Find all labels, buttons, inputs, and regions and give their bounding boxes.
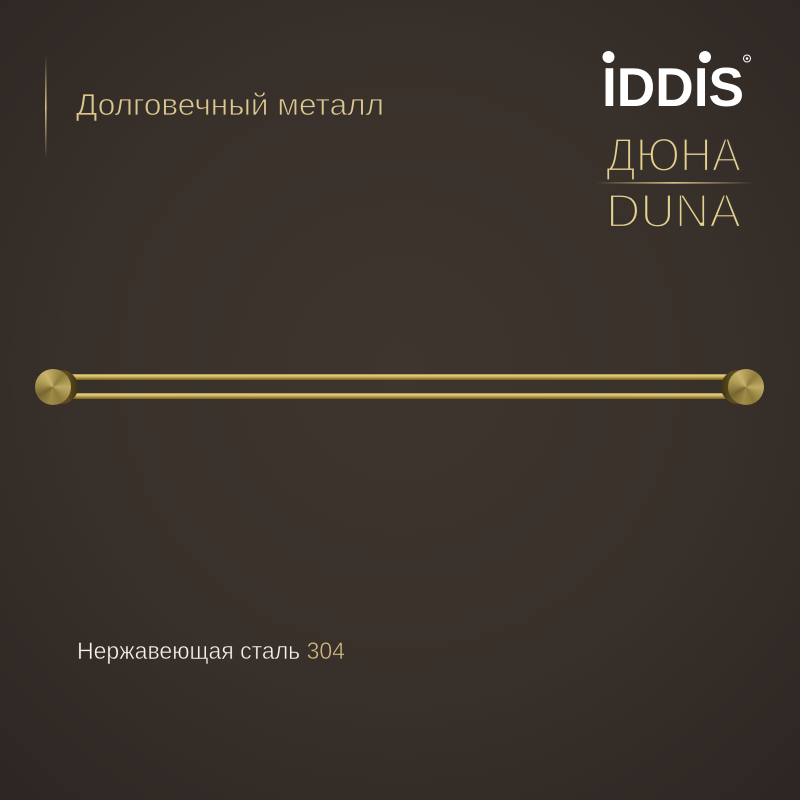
right mount disc xyxy=(728,369,764,405)
series name: Russian: ДЮНА xyxy=(606,128,742,181)
logo: IDDIS: IDDIS xyxy=(602,56,744,118)
caption: stainless steel 304: Нержавеющая сталь 304 xyxy=(77,638,345,665)
left wall mount xyxy=(35,369,78,405)
series name: Latin: DUNA xyxy=(606,184,742,237)
right wall mount xyxy=(721,369,764,405)
heading: durable metal: Долговечный металл xyxy=(76,87,384,122)
left mount cylinder xyxy=(44,370,78,404)
vertical accent line xyxy=(45,55,47,159)
series divider xyxy=(595,182,753,184)
right mount cylinder xyxy=(721,370,755,404)
towel rail bars xyxy=(68,374,732,399)
left mount disc xyxy=(35,369,71,405)
